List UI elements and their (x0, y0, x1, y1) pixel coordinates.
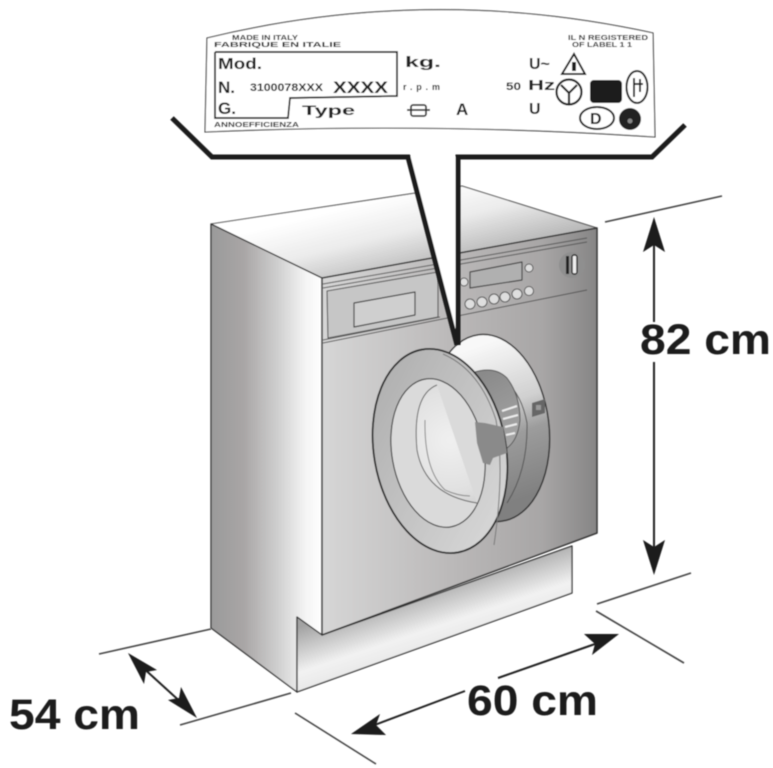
rating label plate (205, 10, 655, 137)
washing machine illustration (211, 186, 597, 692)
small print header left (214, 33, 341, 49)
extension lines (99, 629, 291, 725)
small print header right (568, 35, 648, 49)
type field: Type (302, 102, 355, 118)
kg field: kg. (405, 54, 441, 71)
depth arrow (128, 653, 197, 718)
callout wedge (172, 118, 685, 345)
icon: black certification badge (590, 80, 622, 103)
icon: country oval D: D (590, 111, 602, 128)
rpm field: r.p.m (403, 82, 440, 92)
small print header left: FABRIQUE EN ITALIE (214, 40, 341, 49)
G field: G. (218, 99, 236, 118)
control buttons (460, 264, 534, 309)
washer symbol (407, 105, 430, 116)
model field: Mod. (218, 56, 262, 73)
watt field: U (529, 101, 541, 118)
ampere field: A (456, 100, 468, 119)
serial number field: 3100078XXX (250, 82, 324, 94)
dimension: width 60 cm (295, 611, 684, 764)
frequency field: Hz (528, 77, 555, 94)
depth label: 54 cm (9, 691, 140, 739)
door frame rim (443, 354, 500, 545)
dimension: height 82 cm (597, 196, 771, 604)
height arrow (643, 217, 665, 575)
plate outline (205, 10, 655, 137)
door glass (380, 371, 496, 535)
drum interior (475, 370, 520, 448)
small print header left: MADE IN ITALY (232, 33, 298, 42)
frequency field (506, 77, 555, 94)
callout leader lines (172, 118, 685, 345)
frequency field: 50 (506, 81, 521, 93)
detergent drawer (327, 272, 438, 338)
machine side face (211, 224, 322, 692)
extension lines (597, 196, 722, 604)
door latch button (532, 399, 545, 417)
extension lines (295, 611, 684, 764)
door outer frame (357, 338, 523, 564)
control panel strip (323, 238, 587, 343)
height label: 82 cm (640, 316, 771, 364)
icon: certification circle (556, 80, 582, 104)
small print header right: OF LABEL 1 1 (572, 42, 632, 49)
dimension: depth 54 cm (9, 629, 291, 739)
display (470, 262, 522, 288)
door handle (475, 422, 507, 465)
width arrow (351, 634, 619, 735)
icon: black circle mark (619, 108, 641, 130)
machine top face (211, 186, 597, 278)
brand logo (559, 252, 585, 278)
ring inner lip (493, 373, 527, 503)
plinth base (297, 546, 572, 692)
icon: oval certification mark (626, 71, 648, 103)
icon: warning triangle (562, 54, 585, 74)
door hinge ring (420, 328, 560, 528)
icon: country oval D (580, 107, 614, 129)
small print footer: ANNOEFFICIENZA (214, 122, 299, 129)
serial number field: XXXX (333, 78, 389, 97)
small print header right: IL N REGISTERED (568, 35, 648, 42)
model box (215, 52, 397, 118)
width label: 60 cm (467, 677, 598, 725)
machine front panel (322, 228, 597, 635)
voltage field: U~ (529, 56, 550, 73)
serial number field (218, 78, 389, 97)
serial number field: N. (218, 78, 235, 97)
